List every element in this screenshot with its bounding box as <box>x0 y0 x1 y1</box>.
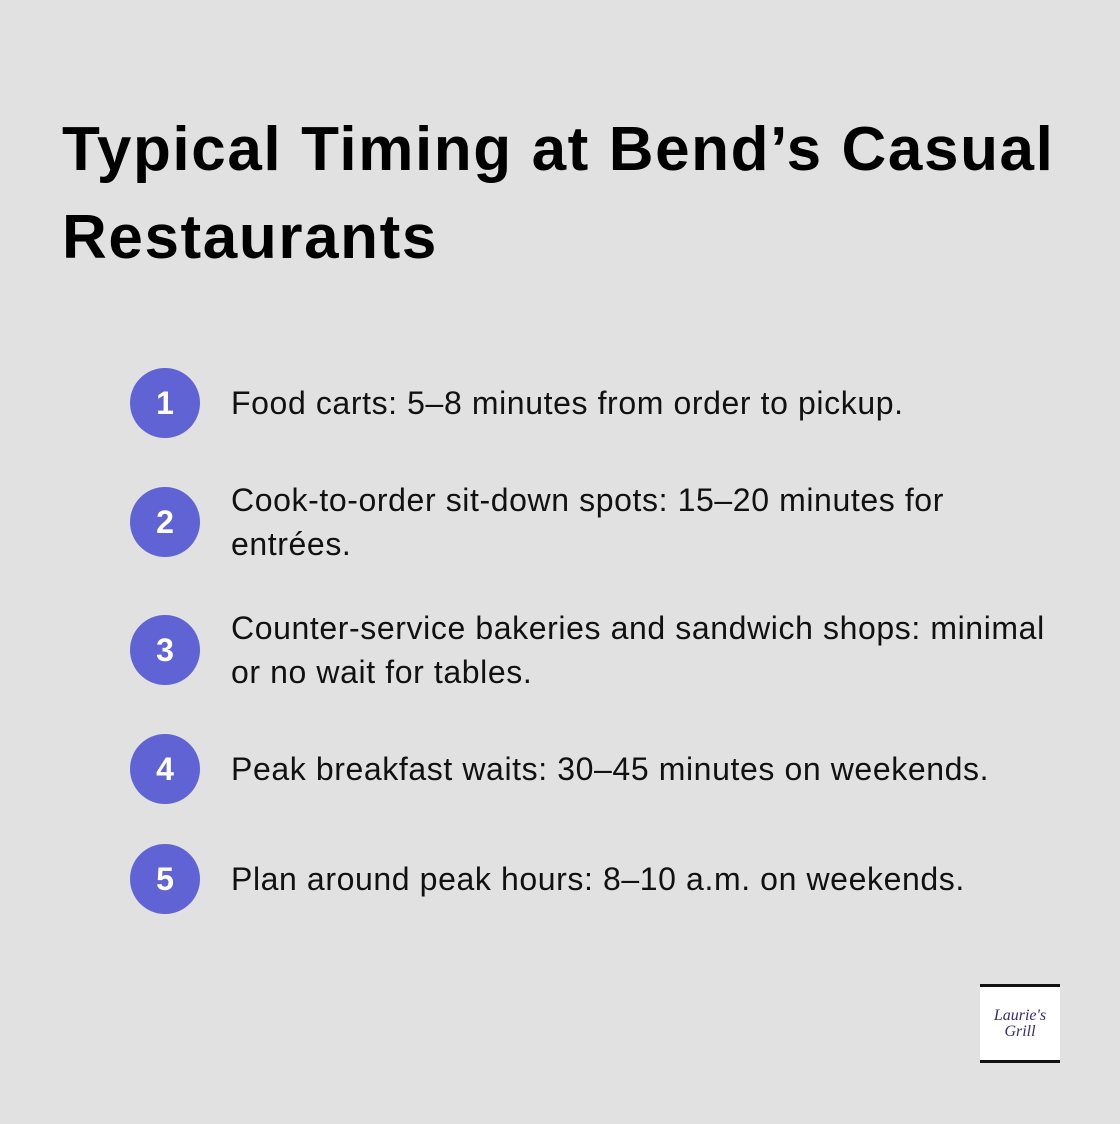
title: Typical Timing at Bend’s Casual <box>62 115 1054 184</box>
item 1 <box>130 368 904 438</box>
circle 4 <box>130 734 200 804</box>
text 2: Cook-to-order sit-down spots: 15–20 minutes for <box>231 482 944 518</box>
item 4 <box>130 734 989 804</box>
text 1: Food carts: 5–8 minutes from order to pickup. <box>231 385 904 421</box>
circle 2 <box>130 487 200 557</box>
logo <box>980 984 1060 1063</box>
text 4: Peak breakfast waits: 30–45 minutes on weekends. <box>231 751 989 787</box>
circle 3: 3 <box>156 632 174 668</box>
logo: Grill <box>1004 1023 1036 1040</box>
text 3: Counter-service bakeries and sandwich shops: minimal <box>231 610 1045 646</box>
circle 3 <box>130 615 200 685</box>
item 2 <box>130 482 944 562</box>
circle 5 <box>130 844 200 914</box>
text 3 <box>231 610 1045 690</box>
text 5: Plan around peak hours: 8–10 a.m. on weekends. <box>231 861 965 897</box>
circle 1 <box>130 368 200 438</box>
circle 5: 5 <box>156 861 174 897</box>
item 3 <box>130 610 1045 690</box>
circle 1: 1 <box>156 385 174 421</box>
text 2 <box>231 482 944 562</box>
item 5 <box>130 844 965 914</box>
circle 4: 4 <box>156 751 174 787</box>
text 3: or no wait for tables. <box>231 654 532 690</box>
circle 2: 2 <box>156 504 174 540</box>
logo: Laurie's <box>994 1007 1046 1024</box>
title: Restaurants <box>62 203 438 272</box>
text 2: entrées. <box>231 526 351 562</box>
title <box>62 115 1054 272</box>
